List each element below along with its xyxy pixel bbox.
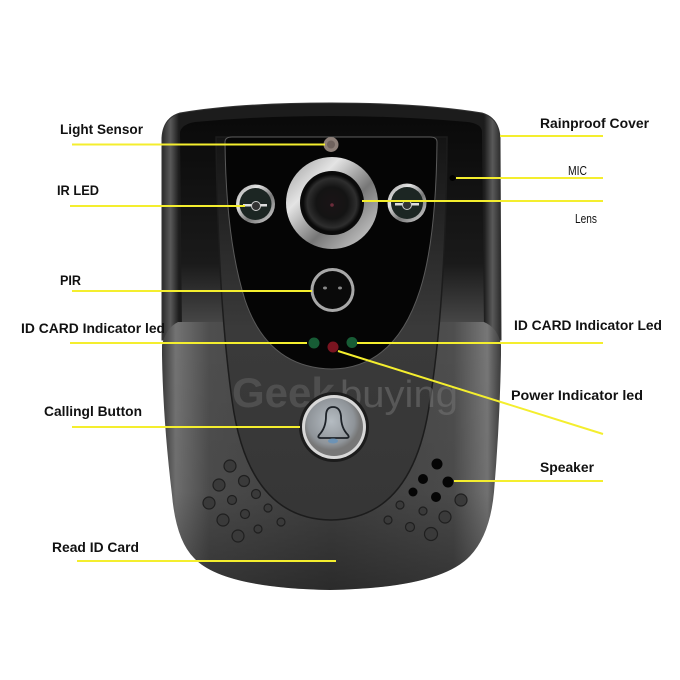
doorbell device <box>162 103 501 590</box>
left speaker holes <box>203 460 285 542</box>
body bottom shading <box>162 345 501 590</box>
rainproof cover <box>162 103 501 340</box>
callout: ID CARD Indicator Led: ID CARD Indicator Led <box>514 318 662 333</box>
callout: Callingl Button: Callingl Button <box>44 404 142 419</box>
bell clapper <box>328 438 338 444</box>
bell icon <box>318 407 349 438</box>
camera lens <box>286 157 378 249</box>
callout: IR LED: IR LED <box>57 183 99 198</box>
right speaker holes open <box>384 494 467 540</box>
callout: MIC: MIC <box>568 163 587 178</box>
device body <box>162 322 501 590</box>
watermark suffix: buying <box>340 374 458 416</box>
right speaker holes black <box>408 458 454 502</box>
cover inner recess <box>180 116 484 330</box>
calling button <box>299 392 369 462</box>
light sensor <box>324 137 338 152</box>
callout: ID CARD Indicator led: ID CARD Indicator led <box>21 321 165 336</box>
callout: Light Sensor: Light Sensor <box>60 122 144 137</box>
left IR LED <box>236 184 275 224</box>
callout: Power Indicator led: Power Indicator led <box>511 388 643 403</box>
callout: Read ID Card: Read ID Card <box>52 540 139 555</box>
callout: Lens: Lens <box>575 211 597 226</box>
right IR LED <box>388 184 426 222</box>
PIR sensor <box>310 268 354 312</box>
green LED left <box>308 338 320 348</box>
callout: PIR: PIR <box>60 273 81 288</box>
callout: Rainproof Cover: Rainproof Cover <box>540 116 650 131</box>
black face panel <box>225 137 437 369</box>
MIC hole <box>450 175 456 181</box>
front oval groove <box>216 137 447 520</box>
watermark: Geek <box>232 369 335 416</box>
callout: Power Indicator led <box>338 351 643 434</box>
callout: Speaker: Speaker <box>540 460 595 475</box>
green LED right <box>346 337 358 348</box>
red LED <box>328 342 338 352</box>
